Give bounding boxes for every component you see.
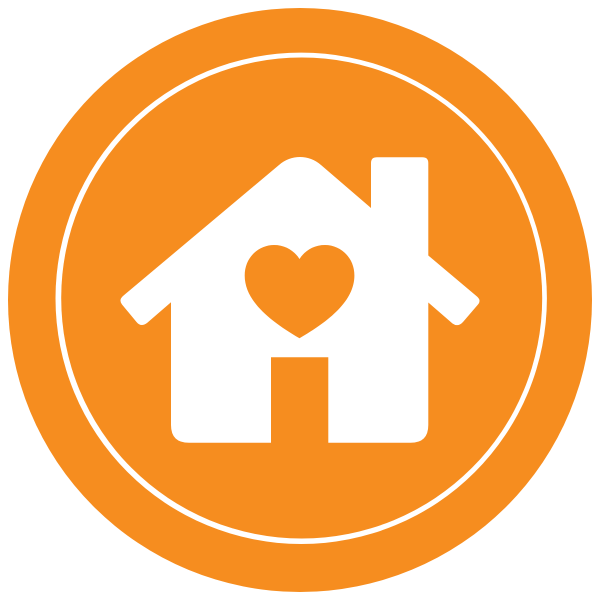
icon: house silhouette	[120, 157, 480, 443]
white inner ring	[56, 53, 547, 544]
icon: heart	[245, 245, 354, 338]
